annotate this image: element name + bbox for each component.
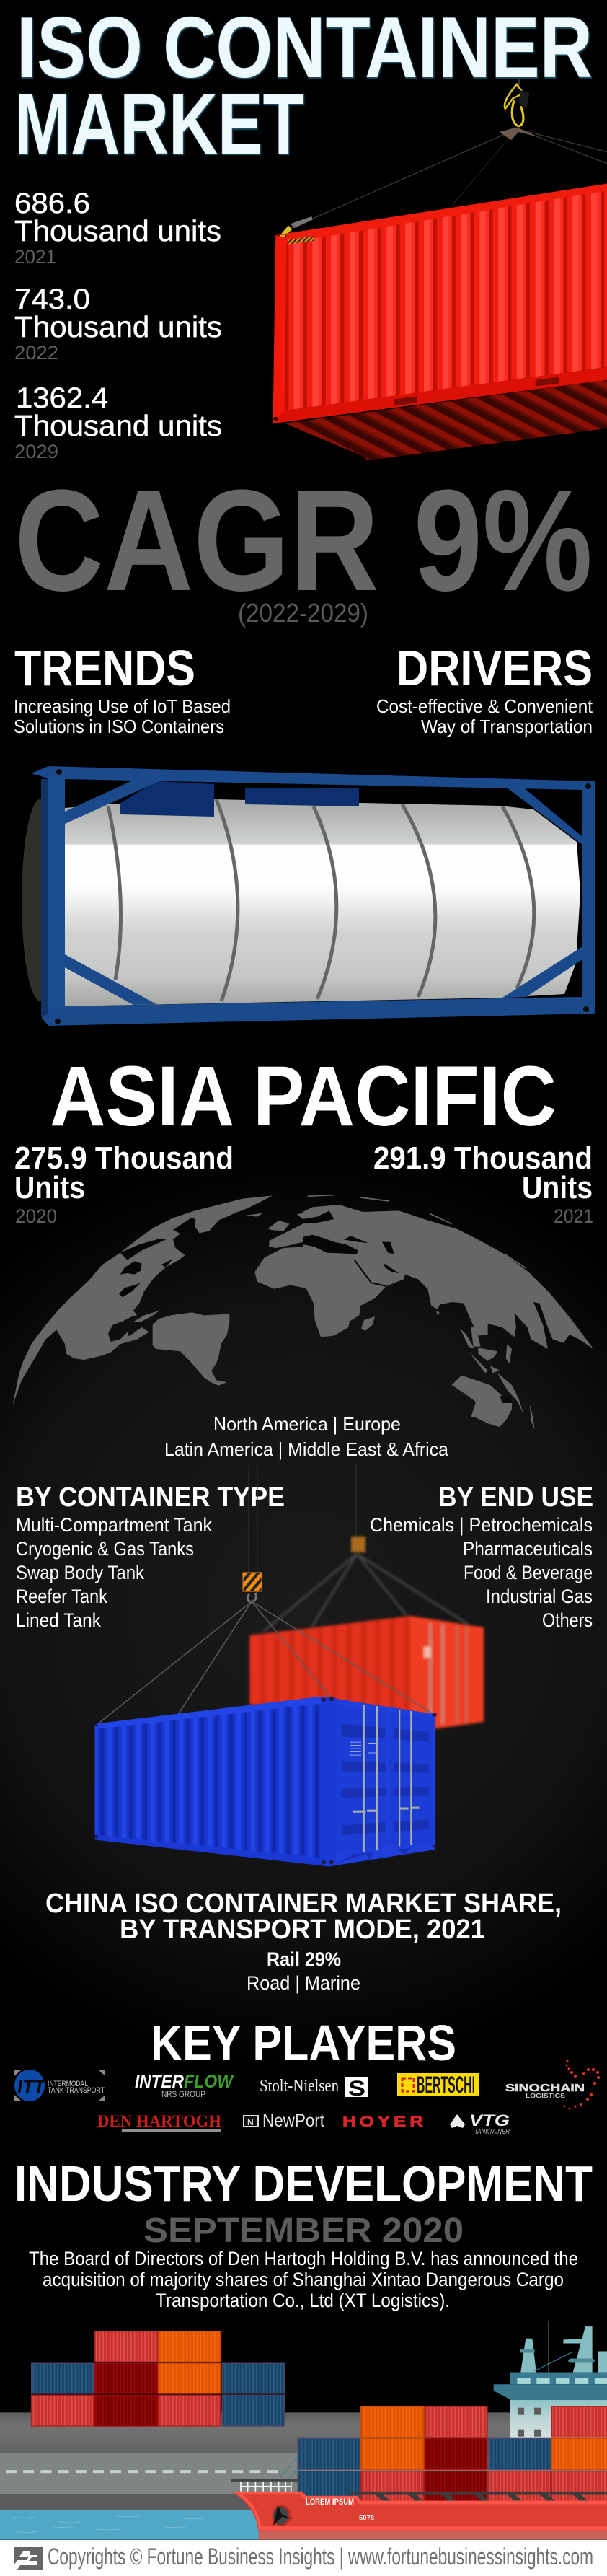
stat: 2029: 2029: [14, 441, 58, 462]
logo: Interflow: [135, 2072, 234, 2099]
logo: Stolt-Nielsen: Stolt-Nielsen: [260, 2077, 339, 2096]
logo: Interflow: INTER: [135, 2072, 184, 2092]
stat: Asia Pacific 2021: 2021: [554, 1205, 593, 1227]
panel: by container type: [16, 1482, 285, 1631]
logo: Den Hartogh: DEN HARTOGH: [97, 2112, 221, 2130]
stat: 2029: [14, 382, 222, 462]
logo: Bertschi: BERTSCHI: [417, 2072, 475, 2098]
heading: China market share: CHINA ISO CONTAINER MARKET SHARE,: [45, 1889, 562, 1919]
panel: trends: Increasing Use of IoT Based: [14, 695, 231, 717]
stat: Asia Pacific 2021: [373, 1140, 593, 1227]
panel: trends: TRENDS: [14, 640, 195, 696]
stat: 2022: [14, 283, 222, 364]
text block: development description: acquisition of majority shares of Shanghai Xintao Dangerous Cargo: [43, 2269, 564, 2290]
panel: by container type: Reefer Tank: [16, 1586, 107, 1607]
illustration: crane hook and blue container: [94, 1465, 437, 1866]
panel: drivers: Way of Transportation: [421, 716, 593, 737]
footer bar: [0, 2540, 607, 2576]
stat: 2021: Thousand units: [14, 214, 221, 247]
logo: VTG Tanktainer: VTG: [469, 2111, 510, 2129]
stat: Asia Pacific 2021: Units: [522, 1170, 593, 1205]
stat: Asia Pacific 2020: [14, 1140, 234, 1227]
logo: Sinochain Logistics: LOGISTICS: [526, 2093, 566, 2099]
panel: drivers: Cost-effective & Convenient: [376, 695, 593, 717]
stat: 2022: Thousand units: [14, 310, 222, 343]
panel: trends: [14, 640, 231, 737]
illustration: port and container ship: [0, 2321, 607, 2540]
stat: Asia Pacific 2020: 2020: [15, 1205, 57, 1227]
stat: Asia Pacific 2021: 291.9 Thousand: [373, 1140, 593, 1176]
illustration: port and container ship: LOREM IPSUM: [306, 2497, 354, 2507]
panel: by end use: Pharmaceuticals: [463, 1538, 593, 1560]
logo: NewPort: N: [247, 2117, 254, 2127]
logo: Interflow: NRS GROUP: [161, 2089, 205, 2099]
logo: Hoyer: HOYER: [342, 2114, 427, 2130]
ship hull: [232, 2492, 607, 2540]
stat: 2022: 743.0: [14, 283, 90, 315]
text block: development description: Transportation Co., Ltd (XT Logistics).: [156, 2290, 450, 2311]
list: other regions: North America | Europe: [213, 1413, 401, 1435]
illustration: red container on crane hook: [273, 79, 607, 460]
panel: by container type: Multi-Compartment Tank: [16, 1514, 212, 1536]
callout: transport mode share: Rail 29%: [267, 1948, 341, 1970]
logo: Stolt-Nielsen: S: [348, 2077, 365, 2101]
illustration: port and container ship: 5078: [359, 2515, 375, 2521]
illustration: world globe: [12, 1195, 593, 1430]
stat: 2021: 2021: [14, 246, 56, 268]
callout: transport mode share: [247, 1948, 360, 1994]
panel: by end use: Chemicals | Petrochemicals: [370, 1514, 593, 1536]
panel: by container type: Cryogenic & Gas Tanks: [16, 1538, 194, 1560]
logo: Intermodal Tank Transport: INTERMODAL: [48, 2080, 88, 2088]
logo: Interflow: FLOW: [184, 2072, 234, 2092]
logo: Bertschi: [397, 2072, 479, 2098]
logo: VTG Tanktainer: [450, 2111, 510, 2136]
illustration: blurred red container with crane: [249, 1464, 484, 1728]
logo: Intermodal Tank Transport: ITT: [17, 2076, 46, 2098]
CAGR period: (2022-2029): [238, 598, 368, 628]
panel: by end use: BY END USE: [438, 1482, 593, 1513]
title: MARKET: [14, 76, 304, 172]
logo: Stolt-Nielsen: [260, 2077, 368, 2101]
stat: 2029: Thousand units: [14, 409, 222, 442]
ship container stack: [298, 2406, 607, 2501]
logo: Sinochain Logistics: SINOCHAIN: [505, 2082, 585, 2094]
text block: development description: [29, 2248, 578, 2311]
panel: by end use: [370, 1482, 593, 1631]
heading: China market share: [45, 1889, 562, 1945]
illustration: tank container: [22, 766, 595, 1026]
list: other regions: [164, 1413, 449, 1460]
quay container stack: [32, 2331, 285, 2426]
date: September 2020: SEPTEMBER 2020: [143, 2212, 464, 2250]
heading: key players: KEY PLAYERS: [151, 2015, 456, 2071]
list: other regions: Latin America | Middle East & Africa: [164, 1438, 449, 1460]
panel: by end use: Others: [542, 1609, 593, 1631]
panel: by container type: BY CONTAINER TYPE: [16, 1482, 285, 1513]
logo: VTG Tanktainer: TANKTAINER: [474, 2128, 510, 2136]
callout: transport mode share: Road | Marine: [247, 1972, 360, 1994]
panel: by container type: Swap Body Tank: [16, 1562, 144, 1583]
ship superstructure: [494, 2321, 607, 2438]
logo: Sinochain Logistics: [505, 2060, 600, 2109]
heading: China market share: BY TRANSPORT MODE, 2021: [120, 1915, 485, 1945]
panel: by end use: Industrial Gas: [486, 1586, 593, 1607]
logo: NewPort: NewPort: [262, 2111, 324, 2131]
title: [14, 0, 593, 172]
stat: 2029: 1362.4: [16, 382, 108, 414]
panel: drivers: [376, 640, 593, 737]
logo: Intermodal Tank Transport: [14, 2070, 105, 2101]
panel: by container type: Lined Tank: [16, 1609, 101, 1631]
stat: Asia Pacific 2020: 275.9 Thousand: [14, 1140, 234, 1176]
logo: Intermodal Tank Transport: TANK TRANSPORT: [48, 2086, 105, 2095]
heading: Asia Pacific: ASIA PACIFIC: [50, 1049, 557, 1144]
stat: 2021: [14, 188, 221, 268]
stat: 2022: 2022: [14, 342, 58, 364]
stat: Asia Pacific 2020: Units: [14, 1170, 85, 1205]
panel: trends: Solutions in ISO Containers: [14, 716, 224, 737]
stat: 2021: 686.6: [14, 188, 90, 219]
